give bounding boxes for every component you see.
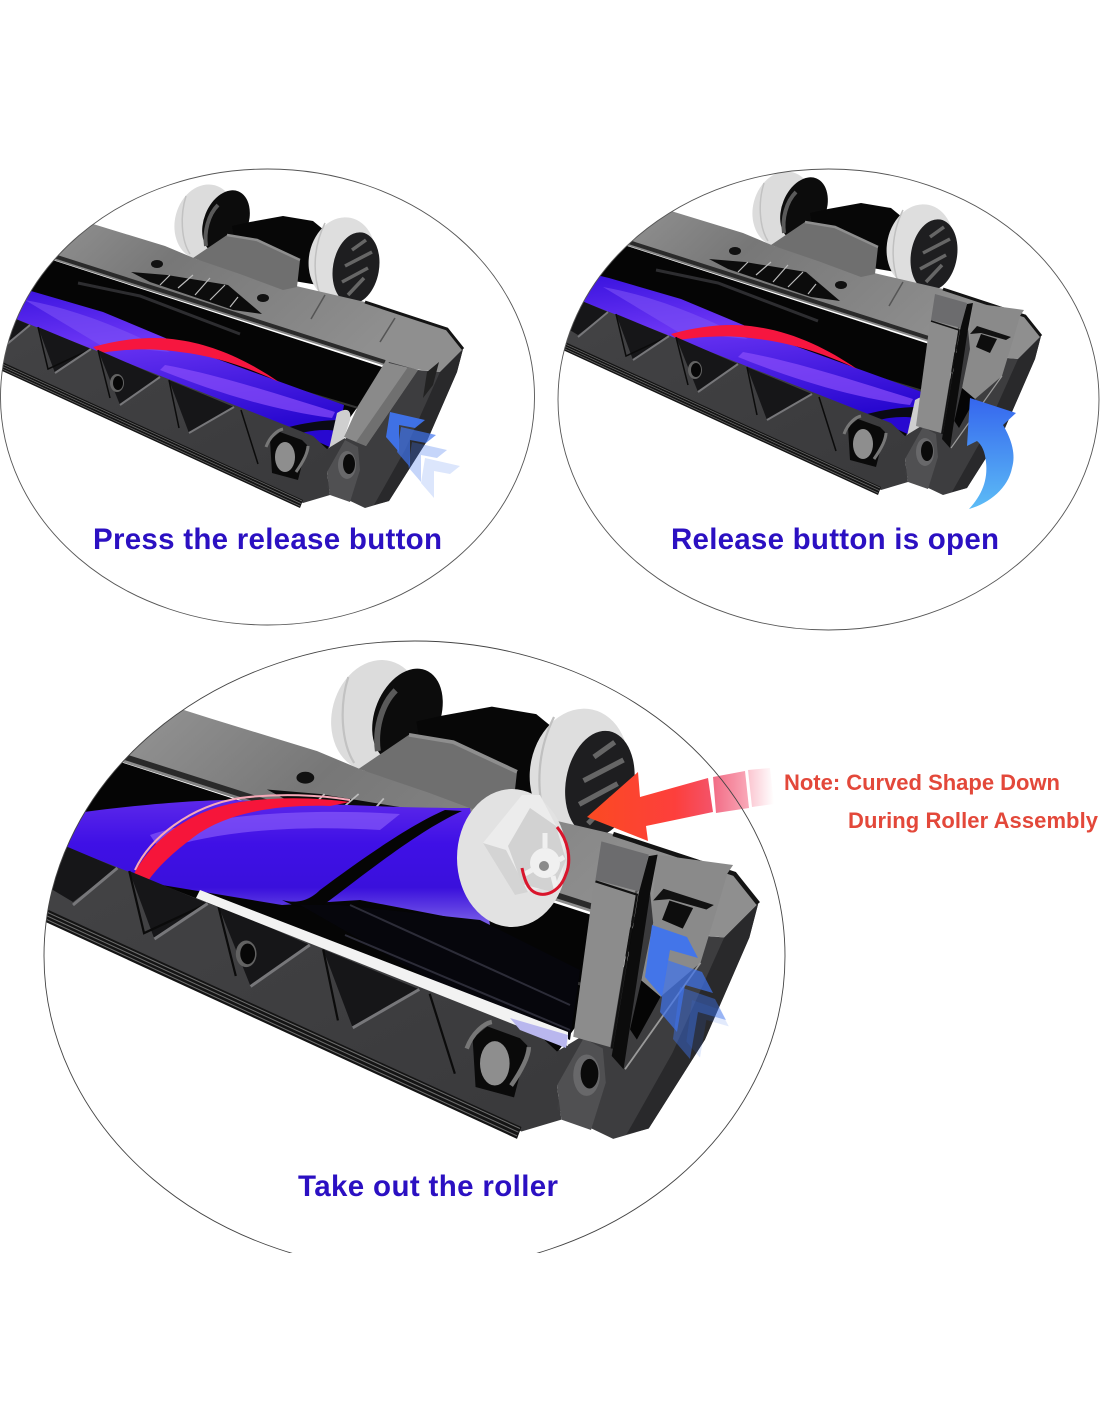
- red curved marker: [522, 827, 569, 894]
- icon: red arrow pointing at the roller: [587, 768, 774, 841]
- icon: blue chevron arrows pressing the button: [386, 412, 460, 498]
- illustration: nozzle with open release button: [528, 165, 1041, 495]
- dark interior under roller: [441, 916, 578, 1040]
- circle outline: [558, 169, 1099, 630]
- panel: take out the roller: [0, 641, 785, 1271]
- panel: release button is open: [528, 165, 1099, 630]
- icon: curved blue arrow: [967, 398, 1016, 509]
- callout: assembly note: During Roller Assembly: [848, 808, 1099, 833]
- caption: release button is open: Release button is open: [671, 523, 999, 556]
- icon: blue chevron arrows on the gate: [645, 925, 729, 1059]
- caption: take out the roller: Take out the roller: [298, 1170, 559, 1203]
- open release gate: [573, 841, 733, 1069]
- caption: press the release button: Press the release button: [93, 523, 442, 556]
- illustration: nozzle with closed release button: [0, 178, 463, 508]
- circle outline: [0, 169, 534, 625]
- callout: assembly note: Note: Curved Shape Down: [784, 770, 1060, 795]
- circle outline, cut at the bottom: [44, 641, 785, 1271]
- illustration: nozzle with roller removed: [0, 650, 758, 1139]
- panel: press the release button: [0, 169, 534, 625]
- white strip: [196, 890, 568, 1046]
- roller body: [50, 795, 490, 925]
- roller end cap with curved marker: [457, 789, 569, 927]
- callout: assembly note: [784, 770, 1099, 833]
